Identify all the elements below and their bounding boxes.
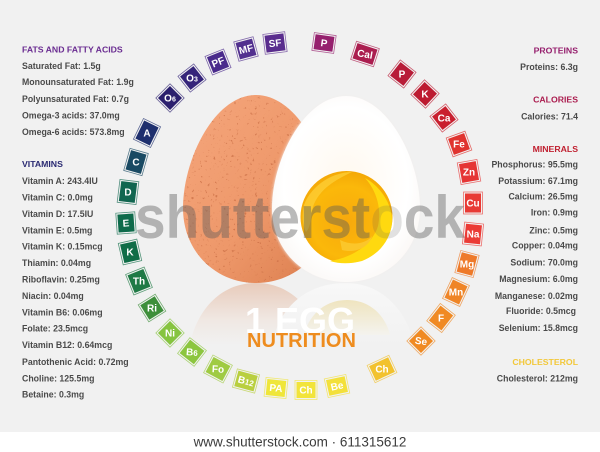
text block: minerals: Sodium: 70.0mg xyxy=(510,258,578,268)
tile: Fo: Fo xyxy=(212,364,224,376)
tile: Th: Th xyxy=(133,276,145,288)
text block: fats and fatty acids: Omega-6 acids: 573.8mg xyxy=(22,127,125,137)
text block: vitamins: Betaine: 0.3mg xyxy=(22,390,84,400)
text block: vitamins: Pantothenic Acid: 0.72mg xyxy=(22,357,129,367)
tile: Be xyxy=(324,374,350,398)
text block: vitamins: Folate: 23.5mcg xyxy=(22,324,88,334)
tile: Ni: Ni xyxy=(165,328,175,340)
tile: PA: PA xyxy=(269,383,283,395)
brown whole egg xyxy=(183,95,302,283)
text block: cholesterol: Cholesterol: 212mg xyxy=(497,374,578,384)
tile: Fe xyxy=(446,131,472,157)
tile: MF xyxy=(234,37,258,61)
tile: Cu: Cu xyxy=(466,198,480,210)
tile: E: E xyxy=(122,218,130,230)
text block: calories: Calories: 71.4 xyxy=(521,112,578,122)
text block: minerals: Zinc: 0.5mg xyxy=(529,226,578,236)
tile: Zn: Zn xyxy=(463,168,475,178)
tile: A xyxy=(133,118,161,148)
text block: minerals: Calcium: 26.5mg xyxy=(508,192,578,202)
tile: Mn xyxy=(443,278,469,306)
text block: fats and fatty acids: Saturated Fat: 1.5g xyxy=(22,61,101,71)
heading: calories: CALORIES xyxy=(533,94,578,104)
tile: B12 xyxy=(232,369,260,393)
text block: vitamins: Vitamin C: 0.0mg xyxy=(22,192,93,202)
tile: B12: B12 xyxy=(237,375,255,390)
tile: Cu xyxy=(464,192,482,214)
tile: Cal: Cal xyxy=(356,48,374,62)
text block: fats and fatty acids: Omega-3 acids: 37.0mg xyxy=(22,110,120,120)
tile: Ca xyxy=(430,104,458,132)
text block: minerals: Fluoride: 0.5mcg xyxy=(506,306,576,316)
heading: proteins: PROTEINS xyxy=(534,46,578,56)
tile: O3 xyxy=(178,64,206,92)
text block: vitamins: Vitamin D: 17.5IU xyxy=(22,209,93,219)
heading: fats: FATS AND FATTY ACIDS xyxy=(22,44,123,54)
text block: calories xyxy=(521,94,578,122)
heading: cholesterol: CHOLESTEROL xyxy=(512,357,579,367)
tile: Mg: Mg xyxy=(460,260,474,270)
tile: Th xyxy=(126,267,152,295)
tile: A: A xyxy=(143,128,151,140)
tile: Na xyxy=(462,222,484,246)
tile: Mg xyxy=(455,250,479,278)
tile: D xyxy=(117,179,139,205)
tile: F xyxy=(427,303,455,333)
text block: minerals: Copper: 0.04mg xyxy=(512,240,578,250)
text block: vitamins: Vitamin A: 243.4IU xyxy=(22,176,98,186)
tile: PF: PF xyxy=(210,55,226,70)
title: 1 egg: 1 EGG xyxy=(245,300,355,341)
text block: minerals: Magnesium: 6.0mg xyxy=(499,274,578,284)
watermark: shutterstock xyxy=(135,184,466,251)
tile: MF: MF xyxy=(238,43,255,57)
text block: minerals: Iron: 0.9mg xyxy=(531,208,578,218)
text block: vitamins: Vitamin K: 0.15mcg xyxy=(22,242,103,252)
tile: C: C xyxy=(132,158,140,168)
ring of nutrient tiles xyxy=(116,32,484,399)
tile: Se: Se xyxy=(414,336,428,348)
tile: Fe: Fe xyxy=(453,140,465,150)
tile: SF: SF xyxy=(268,38,282,50)
tile: O3: O3 xyxy=(186,74,198,84)
text block: minerals: Selenium: 15.8mcg xyxy=(499,323,578,333)
tile: B6: B6 xyxy=(186,347,199,359)
text block: vitamins: Thiamin: 0.04mg xyxy=(22,258,91,268)
tile: E xyxy=(116,212,136,234)
tile: K potassium xyxy=(411,80,439,108)
tile: Se xyxy=(407,327,435,355)
tile: Ri xyxy=(138,294,166,322)
tile: P phosphorus: P xyxy=(399,70,406,80)
tile: K potassium: K xyxy=(421,90,429,100)
title: nutrition: NUTRITION xyxy=(247,330,356,352)
tile: Mn: Mn xyxy=(449,288,463,298)
tile: B6 xyxy=(178,338,206,366)
text block: vitamins: Riboflavin: 0.25mg xyxy=(22,274,100,284)
tile: P phosphorus xyxy=(388,60,416,88)
tile: PF xyxy=(205,49,231,75)
egg yolk xyxy=(300,171,392,263)
tile: K vitamin: K xyxy=(126,248,134,258)
text block: proteins xyxy=(520,46,578,72)
text block: vitamins: Vitamin E: 0.5mg xyxy=(22,226,92,236)
tile: Ch cholesterol xyxy=(367,355,397,383)
tile: Cal xyxy=(351,41,379,67)
text block: cholesterol xyxy=(497,357,579,384)
text block: minerals: Potassium: 67.1mg xyxy=(498,176,578,186)
text block: vitamins: Choline: 125.5mg xyxy=(22,374,94,384)
tile: Be: Be xyxy=(330,380,345,394)
text block: vitamins: Vitamin B6: 0.06mg xyxy=(22,308,103,318)
text block: vitamins: Niacin: 0.04mg xyxy=(22,291,84,301)
tile: P protein: P xyxy=(320,38,328,50)
tile: Ch choline xyxy=(295,380,317,400)
text block: minerals xyxy=(491,144,578,333)
tile: Ch choline: Ch xyxy=(299,386,313,396)
tile: F: F xyxy=(438,314,444,324)
text block: minerals: Manganese: 0.02mg xyxy=(495,291,578,301)
text block: fats and fatty acids: Polyunsaturated Fat: 0.7g xyxy=(22,94,129,104)
tile: PA xyxy=(264,377,288,399)
heading: minerals: MINERALS xyxy=(533,144,578,154)
text block: vitamins: Vitamin B12: 0.64mcg xyxy=(22,340,112,350)
tile: P protein xyxy=(312,33,336,53)
halved boiled egg xyxy=(272,96,420,282)
tile: Ca: Ca xyxy=(438,114,451,124)
text block: vitamins xyxy=(22,159,129,400)
tile: SF xyxy=(263,32,287,54)
footer: image id: www.shutterstock.com · 611315612 xyxy=(193,434,406,450)
tile: Ch cholesterol: Ch xyxy=(375,364,389,376)
tile: O6: O6 xyxy=(164,94,176,104)
tile: Zn xyxy=(457,159,481,185)
tile: Ni xyxy=(156,319,184,347)
tile: Ri: Ri xyxy=(147,304,157,314)
text block: fats and fatty acids xyxy=(22,44,134,137)
tile: C xyxy=(124,148,148,176)
tile: Fo xyxy=(204,355,232,383)
text block: minerals: Phosphorus: 95.5mg xyxy=(491,160,578,170)
tile: Na: Na xyxy=(467,230,480,240)
egg reflection xyxy=(190,283,414,345)
tile: D: D xyxy=(124,188,132,198)
text block: fats and fatty acids: Monounsaturated Fat: 1.9g xyxy=(22,77,134,87)
heading: vitamins: VITAMINS xyxy=(22,159,63,169)
text block: proteins: Proteins: 6.3g xyxy=(520,62,578,72)
tile: O6 xyxy=(156,84,184,112)
tile: K vitamin xyxy=(118,239,142,265)
